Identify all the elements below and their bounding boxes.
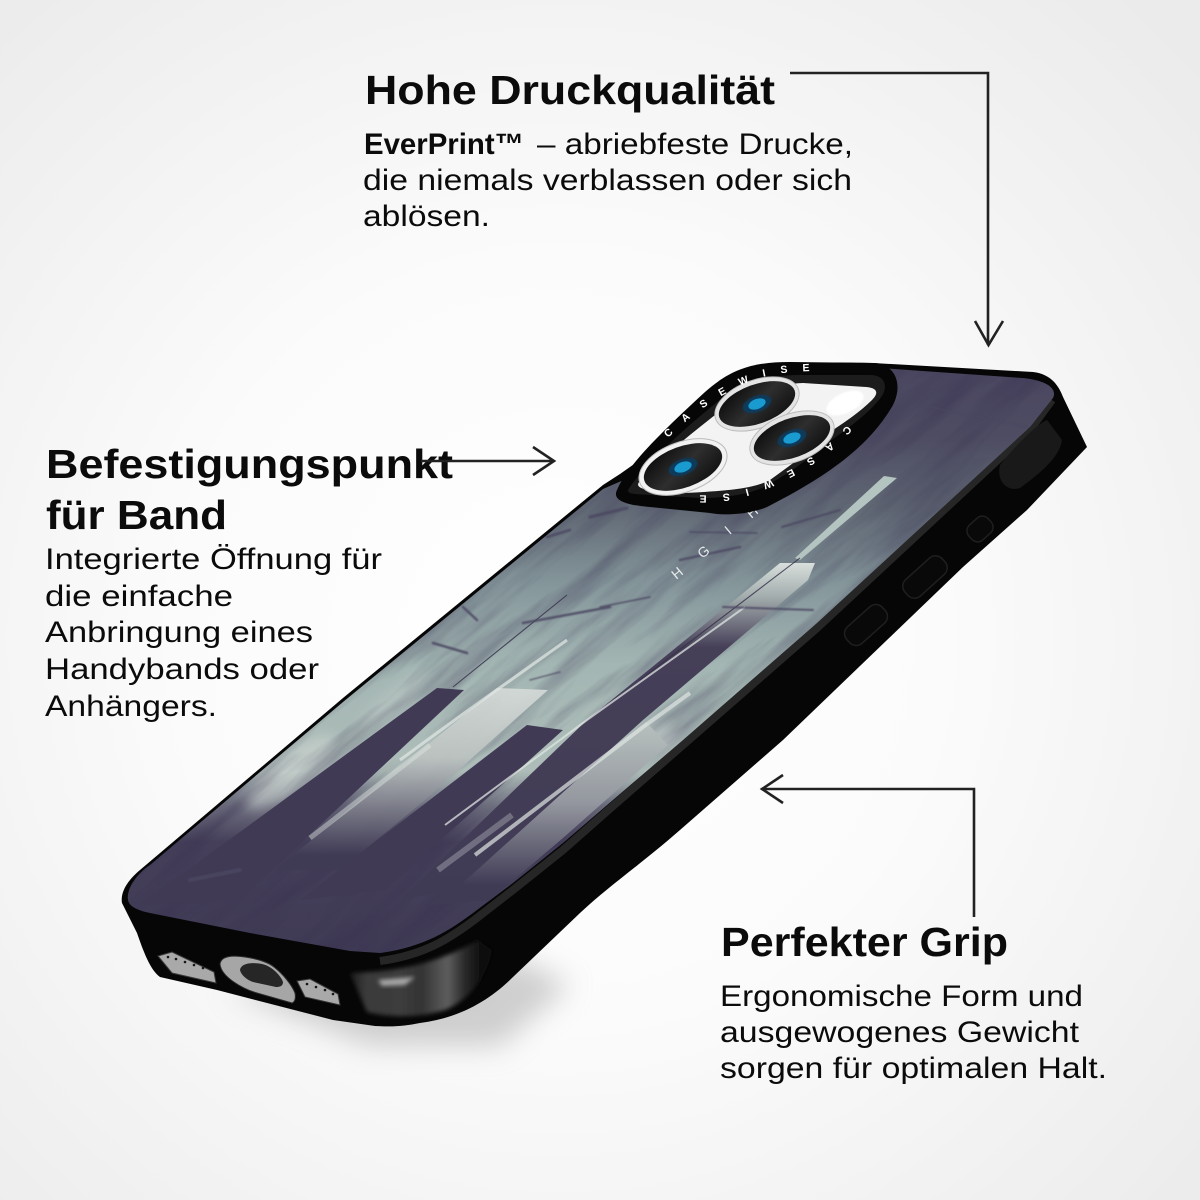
description: ausgewogenes Gewicht	[720, 1016, 1079, 1049]
heading: Hohe Druckqualität	[365, 67, 775, 113]
description: EverPrint™	[364, 128, 524, 161]
speaker holes	[167, 956, 204, 969]
right speaker grille	[297, 979, 340, 1005]
stripe highlights	[310, 607, 745, 870]
needle stripe	[795, 476, 897, 560]
phone case illustration	[122, 362, 1087, 1058]
faint letters: H	[668, 564, 686, 582]
description: die einfache	[45, 580, 233, 613]
long stripe	[464, 563, 815, 877]
faint letters: I	[721, 523, 735, 537]
lens: left	[631, 428, 735, 506]
description: die niemals verblassen oder sich	[363, 164, 852, 197]
heading: Perfekter Grip	[721, 919, 1008, 965]
faint letters: G	[694, 542, 713, 561]
camera bump	[616, 362, 898, 514]
case body	[122, 363, 1087, 1026]
arrow: grip	[762, 775, 974, 917]
pale patches	[242, 676, 678, 814]
drop shadow	[225, 960, 570, 1046]
ring brand text top: CASEWISE	[664, 364, 810, 436]
ring bevel	[628, 375, 885, 498]
description	[45, 543, 382, 723]
heading: für Band	[46, 492, 227, 538]
corner gloss	[350, 940, 492, 1016]
rim around back panel	[380, 400, 1052, 961]
heading: Befestigungspunkt	[46, 441, 453, 487]
description: Ergonomische Form und	[720, 980, 1083, 1013]
right speaker holes	[306, 983, 334, 995]
grey band	[466, 722, 668, 881]
heading	[46, 441, 453, 538]
streak texture	[200, 380, 1031, 836]
description: Anhängers.	[45, 690, 217, 723]
back panel artwork	[128, 368, 1054, 953]
charging port	[220, 956, 295, 1003]
callout: Befestigungspunkt für Band	[45, 441, 453, 723]
description: ablösen.	[363, 200, 490, 233]
description	[363, 128, 853, 233]
arrow: strap attachment	[421, 447, 554, 475]
white band between stripes	[303, 688, 548, 850]
flash	[823, 385, 867, 421]
port opening	[240, 963, 283, 987]
left speaker grille	[158, 952, 216, 983]
callout: Perfekter Grip	[720, 919, 1107, 1085]
lens: right	[742, 400, 842, 476]
lens well	[638, 383, 876, 493]
gloss highlight	[378, 977, 415, 986]
dark stripe 2	[382, 725, 563, 839]
description: Handybands oder	[45, 653, 319, 686]
description: Integrierte Öffnung für	[45, 543, 382, 576]
ring brand text bottom: CASEWISE	[700, 426, 851, 503]
crack marks	[188, 506, 841, 882]
description: sorgen für optimalen Halt.	[720, 1052, 1107, 1085]
mute switch bump	[999, 420, 1062, 489]
description: Anbringung eines	[45, 616, 313, 649]
thin dark line	[453, 558, 800, 687]
description	[720, 980, 1107, 1085]
lens: top	[707, 366, 807, 442]
dark stripe 1	[230, 688, 464, 840]
side buttons	[841, 513, 996, 649]
bump ring	[616, 362, 897, 514]
faint letters	[671, 510, 758, 580]
callout: Hohe Druckqualität	[363, 67, 853, 233]
faint letters: H	[743, 503, 761, 521]
arrow: print quality	[790, 73, 1003, 345]
description: – abriebfeste Drucke,	[537, 128, 853, 161]
